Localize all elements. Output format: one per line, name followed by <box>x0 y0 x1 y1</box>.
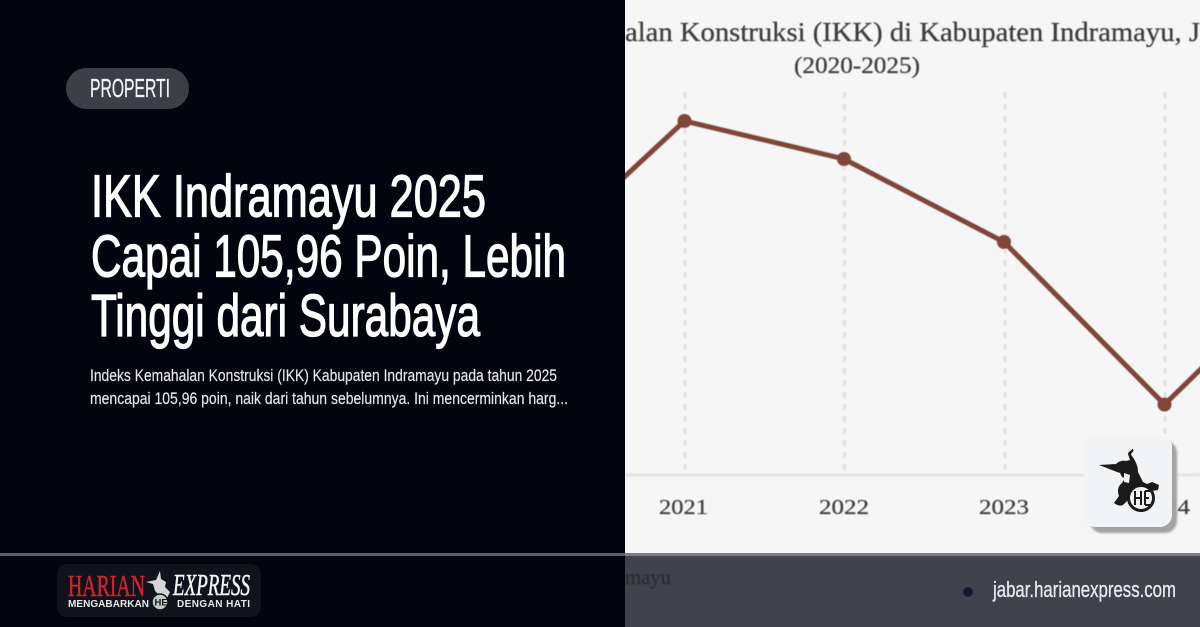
category pill <box>66 68 189 109</box>
logo: Harian Express: DENGAN HATI <box>177 599 250 610</box>
x axis <box>625 474 1200 476</box>
x axis labels: 2022 <box>819 495 869 519</box>
logo: Harian Express: MENGABARKAN <box>68 599 149 610</box>
logo emblem: HE <box>154 598 168 608</box>
panel: footer right <box>625 553 1200 627</box>
footer dot <box>963 587 973 597</box>
logo: Harian Express: HARIAN <box>68 568 145 603</box>
logo emblem <box>146 571 170 610</box>
logo: Harian Express: EXPRESS <box>172 567 250 602</box>
x axis labels: 2023 <box>979 495 1029 519</box>
vertical grid lines <box>685 92 1165 475</box>
line chart <box>620 17 1200 519</box>
headline: Tinggi dari Surabaya <box>91 283 480 349</box>
category pill: PROPERTI <box>90 73 170 103</box>
x axis labels <box>659 499 1190 515</box>
summary text: Indeks Kemahalan Konstruksi (IKK) Kabupaten Indramayu pada tahun 2025 <box>90 366 557 385</box>
summary text <box>90 366 568 408</box>
footer rule <box>0 553 1200 556</box>
panel: footer left <box>0 553 625 627</box>
icon: wayang figure with HE shield <box>1099 449 1159 510</box>
headline: Capai 105,96 Poin, Lebih <box>91 224 566 290</box>
x axis labels: 2021 <box>659 495 708 519</box>
headline: IKK Indramayu 2025 <box>91 164 486 230</box>
chart subtitle: (2020-2025) <box>794 53 920 78</box>
chart title: alan Konstruksi (IKK) di Kabupaten Indramayu, J <box>625 17 1200 47</box>
data line <box>620 121 1200 404</box>
summary text: mencapai 105,96 poin, naik dari tahun sebelumnya. Ini mencerminkan harg... <box>90 389 568 408</box>
headline <box>91 164 566 349</box>
panel: chart background <box>625 0 1200 553</box>
source caption fragment: mayu <box>625 565 671 589</box>
watermark badge <box>1084 435 1177 533</box>
data points <box>678 114 1172 412</box>
panel: left dark overlay <box>0 0 625 553</box>
logo: Harian Express <box>57 564 261 617</box>
x axis labels: 2024 <box>1140 495 1190 519</box>
